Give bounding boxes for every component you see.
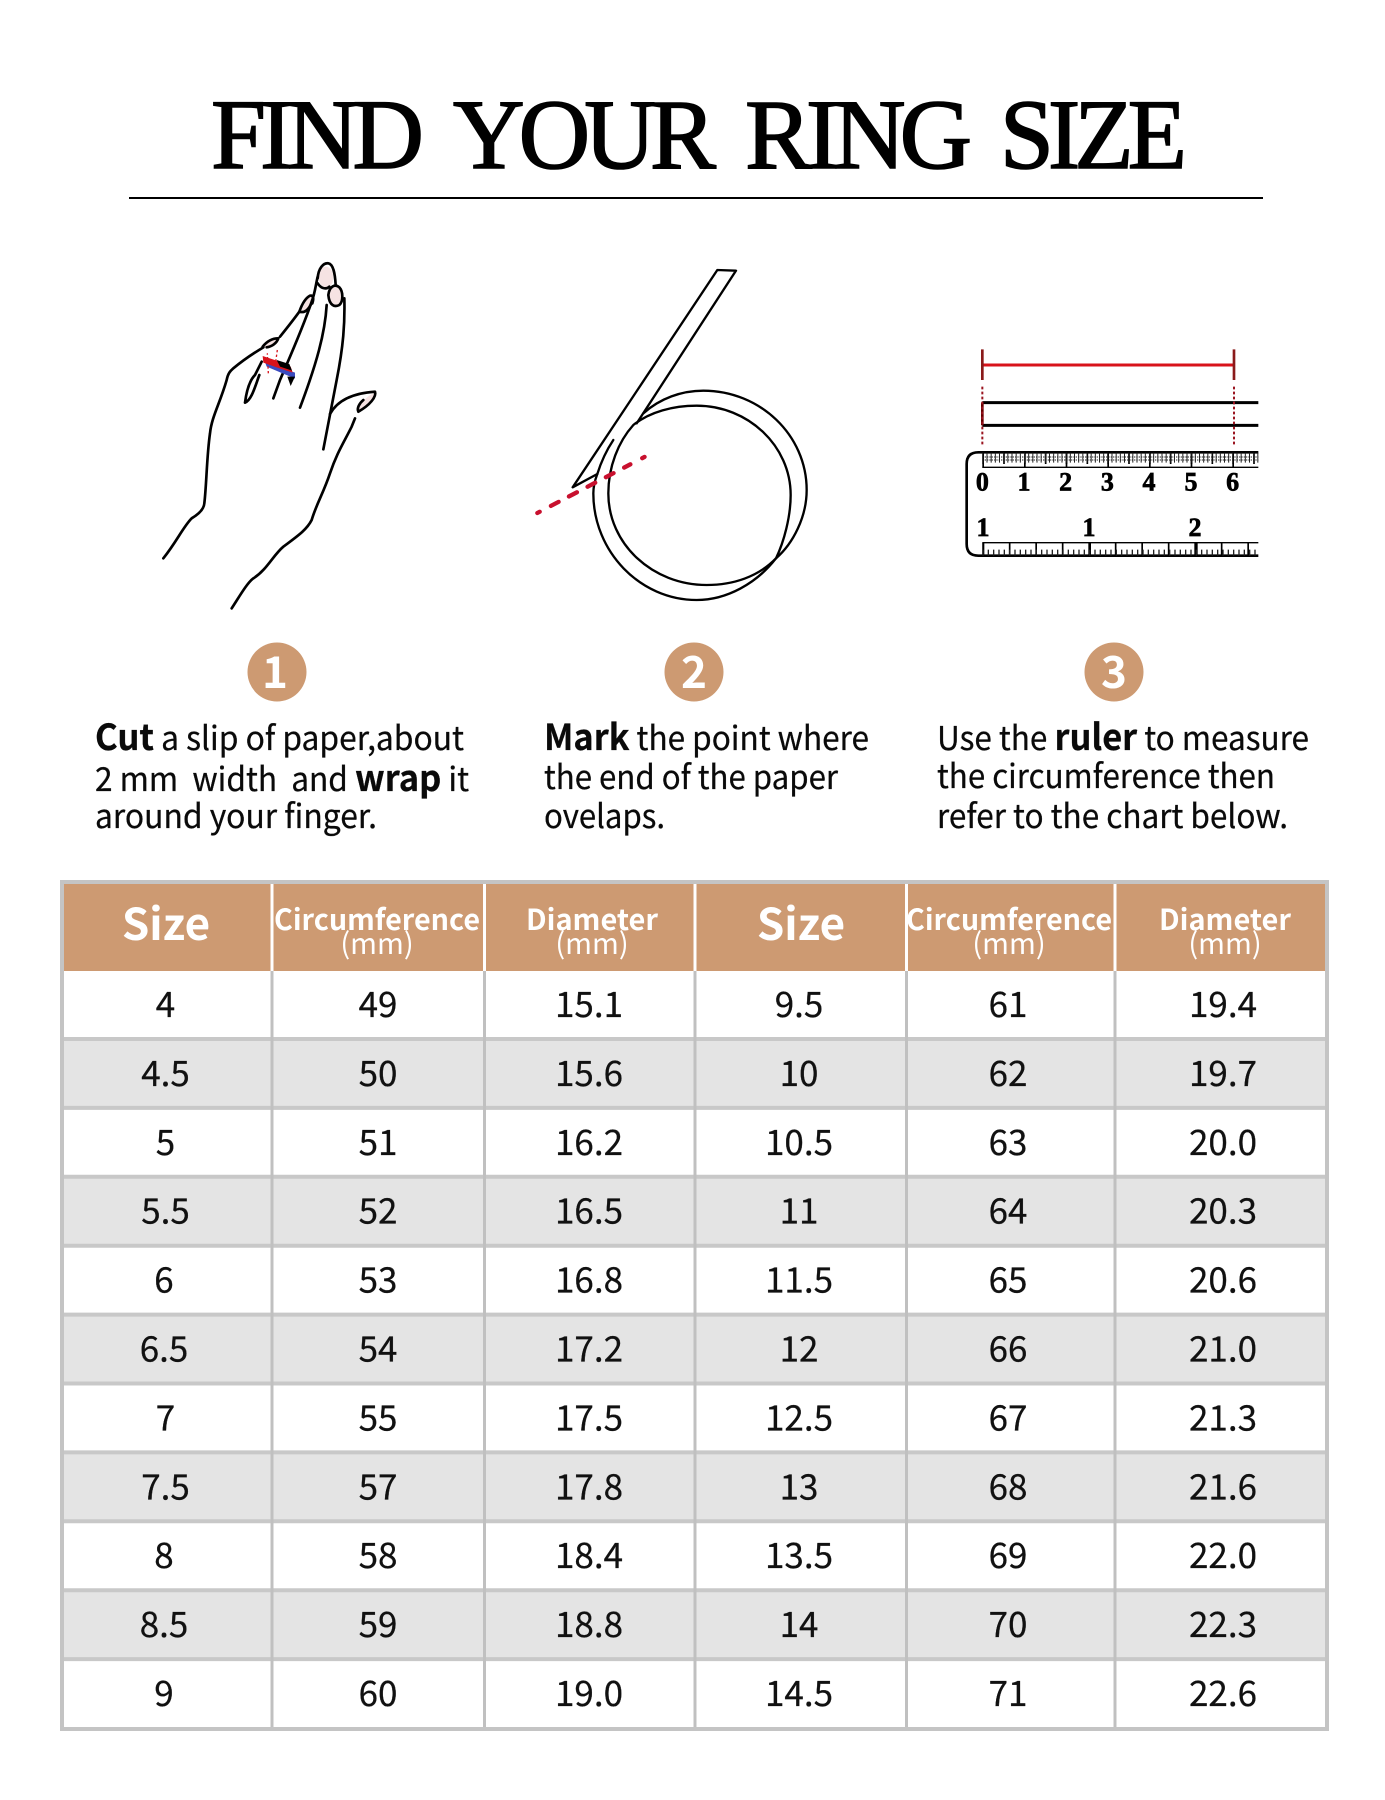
- table rows: 9: [154, 1666, 174, 1717]
- table rows: 61: [989, 977, 1027, 1028]
- table header: Diameter: [1159, 897, 1291, 939]
- table rows: 66: [989, 1322, 1027, 1372]
- table rows: 7: [156, 1390, 175, 1441]
- illustration: hand wearing paper ring: [163, 263, 375, 608]
- table header: (mm): [1188, 921, 1262, 963]
- table rows: 8: [154, 1528, 174, 1579]
- step 2 badge: 2: [681, 637, 707, 701]
- table rows: 70: [989, 1597, 1027, 1648]
- step 1 badge: 1: [262, 637, 288, 701]
- title: YOUR: [453, 79, 716, 190]
- table rows: 19.0: [555, 1666, 623, 1717]
- table rows: 68: [989, 1459, 1027, 1510]
- table rows: 22.3: [1189, 1597, 1257, 1648]
- table rows: 60: [359, 1666, 397, 1717]
- table rows: 21.6: [1189, 1459, 1257, 1510]
- illustration: ruler measuring the paper strip: 4: [1142, 467, 1155, 496]
- step 2 text: ovelaps.: [544, 790, 665, 838]
- illustration: ruler measuring the paper strip: 1: [1017, 467, 1030, 496]
- table header: (mm): [340, 921, 414, 963]
- table rows: 49: [359, 977, 397, 1028]
- table rows: 19.7: [1189, 1046, 1257, 1097]
- table rows: 12.5: [765, 1390, 833, 1441]
- illustration: ruler measuring the paper strip: 0: [976, 467, 989, 496]
- table rows: 20.6: [1189, 1253, 1257, 1304]
- illustration: ruler measuring the paper strip: 6: [1226, 467, 1239, 496]
- illustration: ruler measuring the paper strip: 1: [1082, 513, 1095, 542]
- table rows: 11: [780, 1184, 818, 1235]
- table rows: 19.4: [1189, 977, 1257, 1028]
- step 2 badge: [664, 637, 724, 702]
- ring size table: [62, 882, 1327, 1729]
- illustration: ruler measuring the paper strip: 2: [1188, 513, 1201, 542]
- table rows: 52: [359, 1184, 397, 1235]
- illustration: ruler measuring the paper strip: [967, 349, 1258, 556]
- table rows: 16.5: [555, 1184, 623, 1235]
- step 3 text: the circumference then: [937, 750, 1275, 798]
- step 3 text: Use the ruler to measure: [937, 709, 1309, 761]
- table rows: 6: [154, 1253, 174, 1304]
- title: FIND: [211, 79, 421, 190]
- step 2 text: [544, 709, 869, 838]
- table rows: 13.5: [765, 1528, 833, 1579]
- table rows: 17.2: [555, 1322, 623, 1372]
- table header: Circumference: [274, 897, 480, 939]
- step 1 text: around your finger.: [95, 790, 377, 838]
- table header: (mm): [555, 921, 629, 963]
- table rows: 18.4: [555, 1528, 623, 1579]
- table rows: 53: [359, 1253, 397, 1304]
- step 3 badge: 3: [1101, 637, 1127, 701]
- table rows: 62: [989, 1046, 1027, 1097]
- step 1 text: [95, 709, 469, 838]
- table rows: 15.6: [555, 1046, 623, 1097]
- table header: (mm): [972, 921, 1046, 963]
- table rows: 55: [359, 1390, 397, 1441]
- table rows: 5: [156, 1115, 175, 1166]
- step 2 text: Mark the point where: [544, 709, 869, 761]
- table rows: 22.6: [1189, 1666, 1257, 1717]
- table header: [122, 889, 1291, 963]
- table rows: 9.5: [775, 977, 823, 1028]
- table rows: 63: [989, 1115, 1027, 1166]
- table header: Circumference: [906, 897, 1112, 939]
- table rows: 51: [359, 1115, 397, 1166]
- step 1 badge: [248, 637, 306, 702]
- title: SIZE: [1000, 79, 1183, 190]
- table header: Size: [757, 889, 845, 953]
- step 3 badge: [1084, 637, 1144, 702]
- table rows: 14: [780, 1597, 818, 1648]
- table rows: 18.8: [555, 1597, 623, 1648]
- step 3 text: refer to the chart below.: [937, 790, 1288, 838]
- title: [211, 79, 1183, 190]
- table rows: 13: [780, 1459, 818, 1510]
- illustration: ruler measuring the paper strip: 5: [1184, 467, 1197, 496]
- table rows: 16.2: [555, 1115, 623, 1166]
- illustration: ruler measuring the paper strip: 3: [1101, 467, 1114, 496]
- table header: Diameter: [526, 897, 658, 939]
- step 2 text: the end of the paper: [544, 751, 838, 799]
- table rows: 59: [359, 1597, 397, 1648]
- table rows: 54: [359, 1322, 397, 1372]
- table rows: 14.5: [765, 1666, 833, 1717]
- table rows: 58: [359, 1528, 397, 1579]
- table rows: 21.3: [1189, 1390, 1257, 1441]
- table header: Size: [122, 889, 210, 953]
- step 1 text: Cut a slip of paper,about: [95, 709, 464, 761]
- step 3 text: [937, 709, 1309, 838]
- table rows: 65: [989, 1253, 1027, 1304]
- table rows: 17.5: [555, 1390, 623, 1441]
- table rows: 5.5: [141, 1184, 190, 1235]
- table rows: 11.5: [765, 1253, 833, 1304]
- illustration: ruler measuring the paper strip: 2: [1059, 467, 1072, 496]
- table rows: 20.3: [1189, 1184, 1257, 1235]
- illustration: paper strip wrapped with red mark: [537, 270, 807, 600]
- table rows: 12: [780, 1322, 818, 1372]
- table rows: 57: [359, 1459, 397, 1510]
- table rows: 4: [156, 977, 175, 1028]
- table rows: 21.0: [1189, 1322, 1257, 1372]
- step 1 text: 2 mm width and wrap it: [95, 750, 469, 802]
- title: RING: [745, 79, 970, 190]
- table rows: 15.1: [555, 977, 623, 1028]
- table rows: 10: [780, 1046, 818, 1097]
- table rows: [140, 977, 1257, 1717]
- illustration: ruler measuring the paper strip: 1: [976, 513, 989, 542]
- table rows: 10.5: [765, 1115, 833, 1166]
- table rows: 17.8: [555, 1459, 623, 1510]
- table rows: 7.5: [141, 1459, 190, 1510]
- table rows: 71: [989, 1666, 1027, 1717]
- table background and grid: [62, 882, 1327, 1729]
- table rows: 22.0: [1189, 1528, 1257, 1579]
- table rows: 8.5: [140, 1597, 188, 1648]
- table rows: 6.5: [140, 1322, 188, 1372]
- table rows: 20.0: [1189, 1115, 1257, 1166]
- table rows: 69: [989, 1528, 1027, 1579]
- table rows: 16.8: [555, 1253, 623, 1304]
- table rows: 64: [989, 1184, 1027, 1235]
- table rows: 4.5: [141, 1046, 190, 1097]
- table rows: 50: [359, 1046, 397, 1097]
- table rows: 67: [989, 1390, 1027, 1441]
